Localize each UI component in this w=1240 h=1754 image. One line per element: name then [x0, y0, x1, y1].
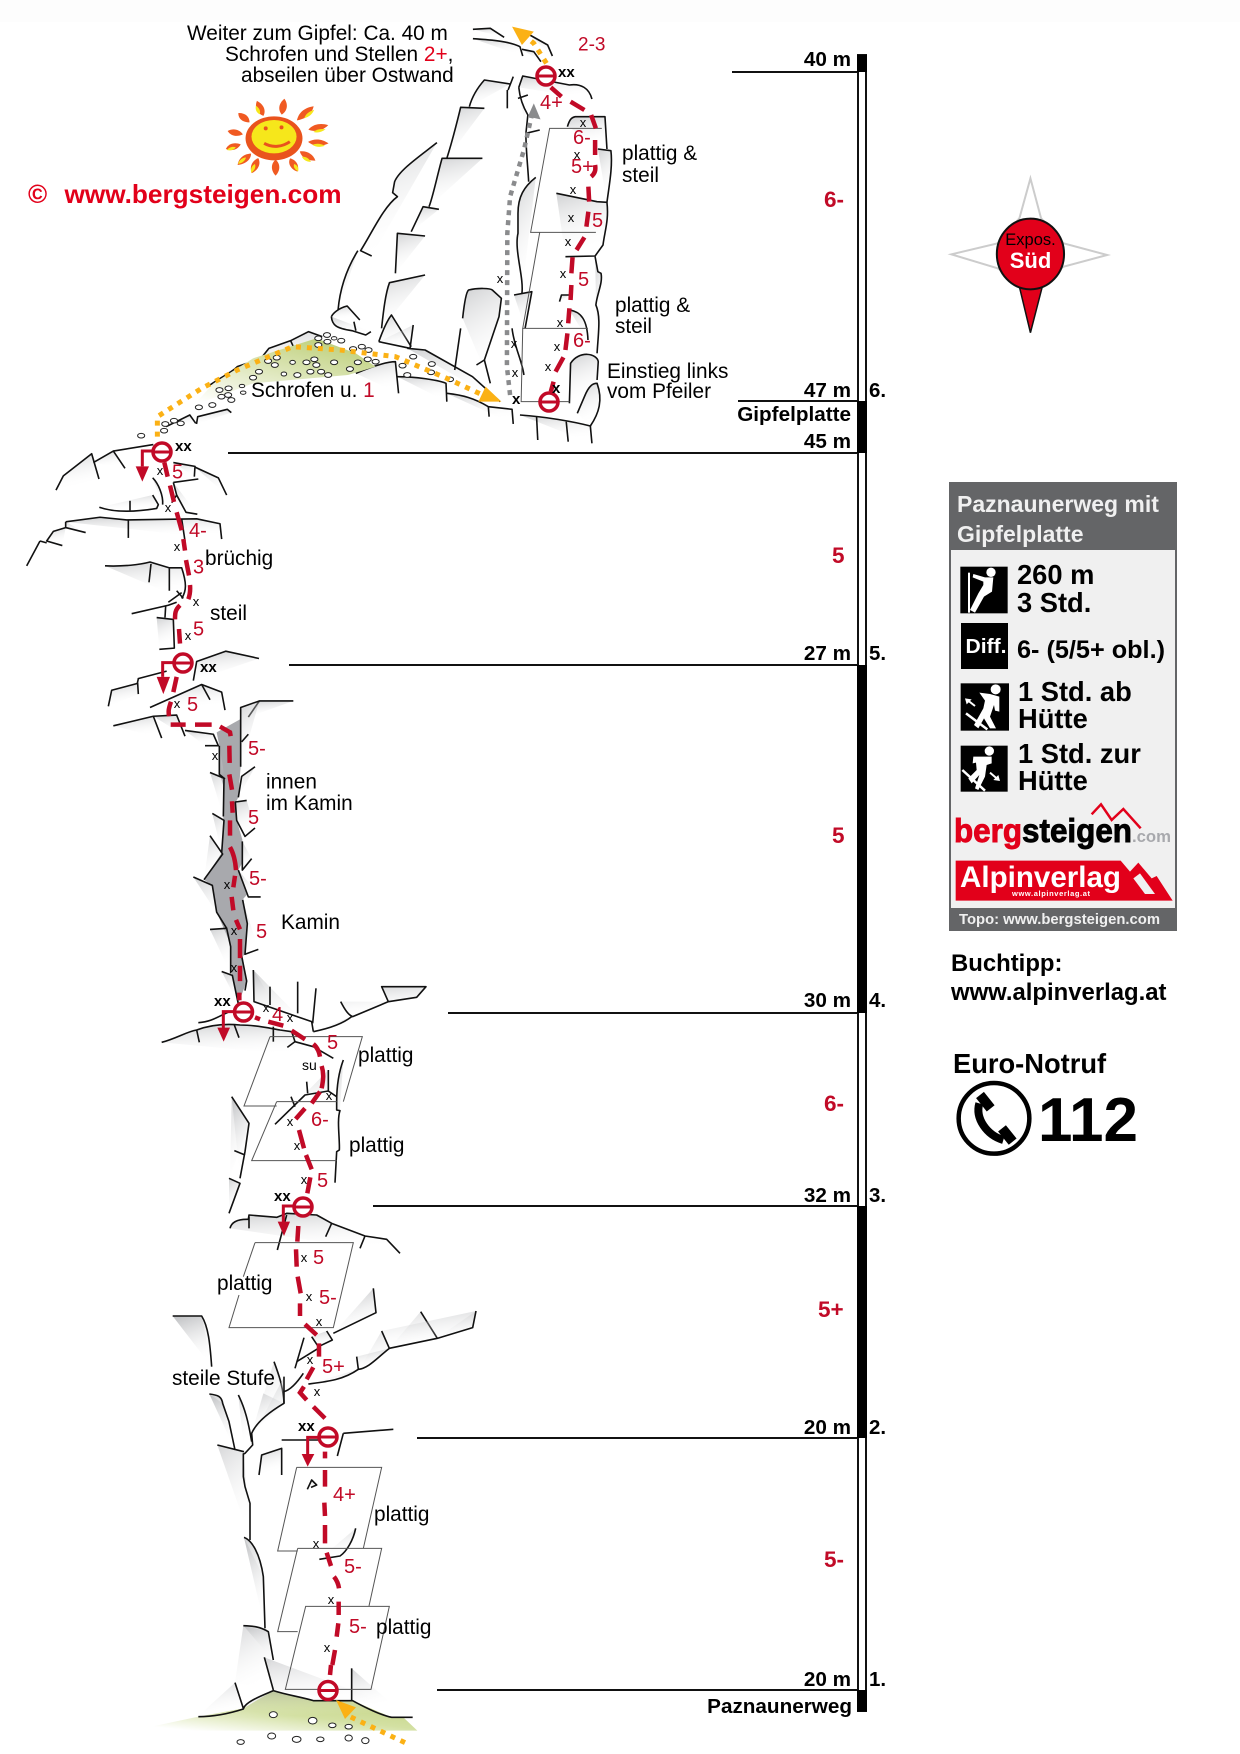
- bolt marks: [157, 115, 587, 1655]
- approach path: yellow dotted arrows: [157, 27, 546, 437]
- bolt marks: x: [185, 628, 192, 643]
- bolt marks: x: [306, 1289, 313, 1304]
- route notes: steil: [210, 602, 247, 625]
- rock face: middle pitches: [27, 445, 293, 1004]
- grade labels on the route: 5: [172, 462, 183, 484]
- icon: difficulty: [961, 623, 1008, 669]
- bolt marks: x: [287, 1010, 294, 1025]
- grade labels on the route: 5+: [571, 156, 594, 178]
- pitch grades: 6-: [824, 1091, 844, 1116]
- pitch lengths: 45 m: [804, 430, 851, 453]
- difficulty: 6- (5/5+ obl.): [1017, 636, 1165, 664]
- grade labels on the route: 6-: [573, 330, 591, 352]
- bolt marks: x: [193, 594, 200, 609]
- grade labels on the route: 5-: [248, 738, 266, 760]
- belay labels: x: [512, 391, 521, 408]
- bolt marks: x: [212, 748, 219, 763]
- route notes: steil: [622, 164, 659, 187]
- bolt marks: x: [301, 1250, 308, 1265]
- belay labels: xx: [558, 64, 575, 81]
- compass text: Expos.: [1005, 231, 1056, 249]
- bolt marks: x: [512, 365, 519, 380]
- bolt marks: x: [157, 463, 164, 478]
- logo: bergsteigen.com: bergsteigen: [954, 812, 1132, 849]
- pitch grades: 6-: [824, 187, 844, 212]
- icon: telephone: [959, 1083, 1029, 1154]
- grade labels on the route: 4-: [189, 520, 207, 542]
- pitch numbers: 3.: [869, 1184, 886, 1207]
- pitch numbers: 4.: [869, 989, 886, 1012]
- grade labels on the route: 6-: [573, 127, 591, 149]
- belay labels: xx: [175, 438, 192, 455]
- bolt marks: x: [231, 923, 238, 938]
- route notes: steile Stufe: [172, 1367, 275, 1390]
- descent time: 1 Std. zur: [1018, 738, 1141, 769]
- logo: Alpinverlag: Alpinverlag: [960, 861, 1121, 894]
- emergency heading: Euro-Notruf: [953, 1048, 1107, 1079]
- pitch lengths: 32 m: [804, 1184, 851, 1207]
- belay labels: xx: [274, 1188, 291, 1205]
- approach time: [1018, 676, 1132, 734]
- belay labels: x: [552, 380, 561, 397]
- length scale bar: [857, 55, 867, 1712]
- rock shading: lower wall: [173, 970, 476, 1716]
- approach path: start of route: [336, 1700, 405, 1743]
- climbing route: red dashes, first pitch: [324, 1452, 339, 1675]
- panel: route summary: [949, 482, 1177, 931]
- bolt marks: x: [568, 210, 575, 225]
- route notes: brüchig: [205, 547, 273, 570]
- route notes: plattig: [376, 1616, 432, 1639]
- route notes: abseilen über Ostwand: [241, 64, 454, 87]
- grade labels on the route: 4+: [540, 92, 563, 114]
- bolt marks: x: [554, 339, 561, 354]
- bolt marks: x: [497, 271, 504, 286]
- bolt marks: x: [224, 877, 231, 892]
- pitch lengths: [707, 48, 852, 1718]
- grade labels on the route: 5: [578, 269, 589, 291]
- pitch lengths: 27 m: [804, 642, 851, 665]
- route notes: Schrofen u. 1: [251, 379, 375, 402]
- bolt marks: x: [174, 539, 181, 554]
- rock face: lower pitches: [162, 970, 476, 1403]
- pitch numbers: 6.: [869, 379, 886, 402]
- pitch grades: [818, 187, 845, 1572]
- route notes: im Kamin: [266, 792, 353, 815]
- route notes: [172, 22, 728, 1639]
- grade labels on the route: 5: [248, 807, 259, 829]
- climbing length and time: 3 Std.: [1017, 587, 1091, 618]
- approach time: Hütte: [1018, 703, 1088, 734]
- bolt marks: x: [231, 960, 238, 975]
- route plates: first pitch: [278, 1467, 389, 1689]
- belay stations: red rings: [153, 67, 558, 1700]
- emergency number: 112: [1038, 1086, 1138, 1155]
- pitch lengths: 40 m: [804, 48, 851, 71]
- descent time: Hütte: [1018, 765, 1088, 796]
- route notes: Weiter zum Gipfel: Ca. 40 m: [187, 22, 448, 45]
- pitch numbers: 2.: [869, 1416, 886, 1439]
- bolt marks: x: [307, 1352, 314, 1367]
- route notes: Einstieg links: [607, 360, 728, 383]
- belay labels: xx: [298, 1418, 315, 1435]
- pitch lengths: Paznaunerweg: [707, 1695, 852, 1718]
- logo: bergsteigen.com: .com: [1132, 827, 1171, 846]
- bolt marks: x: [570, 182, 577, 197]
- descent time: [1018, 738, 1141, 796]
- bolt marks: x: [511, 336, 518, 351]
- grade labels on the route: 5-: [319, 1287, 337, 1309]
- bolt marks: x: [165, 500, 172, 515]
- grade labels on the route: 3: [193, 556, 204, 578]
- grade labels on the route: 6-: [311, 1109, 329, 1131]
- approach time: 1 Std. ab: [1018, 676, 1132, 707]
- grade labels on the route: 5-: [349, 1616, 367, 1638]
- pitch lengths: Gipfelplatte: [737, 403, 851, 426]
- copyright line: www.bergsteigen.com: [63, 179, 341, 209]
- grade labels on the route: [172, 34, 605, 1638]
- belay labels: xx: [200, 659, 217, 676]
- grade labels on the route: 5-: [344, 1556, 362, 1578]
- bolt marks: x: [580, 115, 587, 130]
- panel title: Paznaunerweg mit: [957, 491, 1159, 517]
- route plates: lower pitches: [229, 1037, 362, 1328]
- icon: sun: [225, 98, 329, 176]
- climbing route: red dashes, middle: [164, 463, 240, 1000]
- climbing length and time: [1017, 559, 1094, 618]
- rock face: summit tower: [166, 28, 611, 443]
- book tip: Buchtipp:: [951, 950, 1062, 977]
- bolt marks: x: [287, 1114, 294, 1129]
- bolt marks: x: [560, 266, 567, 281]
- bolt marks: x: [313, 1536, 320, 1551]
- icon: exposition compass: [951, 178, 1107, 333]
- route notes: su: [302, 1057, 317, 1073]
- bolt marks: x: [301, 1172, 308, 1187]
- pitch lines: [228, 72, 858, 1690]
- pitch numbers: 1.: [869, 1668, 886, 1691]
- grade labels on the route: 5-: [249, 868, 267, 890]
- icon: hiker ascent: [961, 683, 1009, 731]
- route notes: plattig &: [615, 294, 690, 317]
- climbing route: red dashes, lower: [255, 1017, 325, 1418]
- scree slope: green terrace: [138, 333, 454, 438]
- panel title: Gipfelplatte: [957, 521, 1084, 547]
- compass text: [1005, 231, 1056, 273]
- book tip: www.alpinverlag.at: [950, 979, 1167, 1006]
- bolt marks: x: [263, 1000, 270, 1015]
- route notes: plattig: [217, 1272, 272, 1295]
- pitch numbers: 5.: [869, 642, 886, 665]
- route notes: plattig: [349, 1134, 404, 1157]
- pitch lengths: 20 m: [804, 1668, 851, 1691]
- bolt marks: x: [314, 1384, 321, 1399]
- pitch grades: 5-: [824, 1547, 844, 1572]
- panel footer: Topo: www.bergsteigen.com: [959, 911, 1160, 928]
- grade labels on the route: 5: [256, 921, 267, 943]
- route notes: steil: [615, 315, 652, 338]
- route notes: plattig &: [622, 142, 697, 165]
- bolt marks: x: [174, 696, 181, 711]
- grade labels on the route: 5: [592, 210, 603, 232]
- bolt marks: x: [557, 315, 564, 330]
- bolt marks: x: [574, 147, 581, 162]
- grade labels on the route: 5: [187, 694, 198, 716]
- icon: hiker descent: [961, 746, 1008, 792]
- route notes: Kamin: [281, 911, 340, 934]
- copyright line: ©: [28, 179, 47, 209]
- grade labels on the route: 5: [193, 618, 204, 640]
- route plates: summit tower: [521, 128, 602, 402]
- bolt marks: x: [294, 1138, 301, 1153]
- bolt marks: x: [545, 359, 552, 374]
- logo: Alpinverlag: [956, 861, 1173, 901]
- chimney: grey fill: [204, 719, 247, 1004]
- bolt marks: x: [565, 234, 572, 249]
- belay labels: [175, 64, 575, 1435]
- grade labels on the route: 5: [313, 1247, 324, 1269]
- bolt marks: x: [316, 1314, 323, 1329]
- route notes: Schrofen und Stellen 2+,: [225, 43, 453, 66]
- route notes: plattig: [358, 1044, 414, 1067]
- climbing length and time: 260 m: [1017, 559, 1094, 590]
- climbing route: red dashes, summit tower: [551, 87, 596, 392]
- descent path: grey dotted arrow: [507, 103, 541, 395]
- grade labels on the route: 4: [272, 1004, 283, 1026]
- pitch lengths: 20 m: [804, 1416, 851, 1439]
- route notes: innen: [266, 770, 317, 794]
- pitch grades: 5: [832, 543, 845, 568]
- pitch lengths: 47 m: [804, 379, 851, 402]
- icon: difficulty: Diff.: [966, 636, 1006, 658]
- grade labels on the route: 5: [317, 1170, 328, 1192]
- meadow at the start: [143, 1691, 417, 1744]
- bolt marks: x: [328, 1592, 335, 1607]
- panel title: [957, 491, 1159, 547]
- compass text: Süd: [1010, 248, 1051, 273]
- rock face: first pitch: [198, 1377, 413, 1717]
- route notes: plattig: [374, 1503, 430, 1526]
- icon: climber: [960, 567, 1008, 613]
- pitch grades: 5: [832, 823, 845, 848]
- route notes: vom Pfeiler: [607, 380, 711, 403]
- grade labels on the route: 5+: [322, 1356, 345, 1378]
- logo: Alpinverlag: www.alpinverlag.at: [1011, 889, 1090, 898]
- belay labels: xx: [214, 993, 231, 1010]
- grade labels on the route: 5: [327, 1032, 338, 1054]
- book tip: [950, 950, 1167, 1006]
- pitch grades: 5+: [818, 1297, 844, 1322]
- bolt marks: x: [326, 1088, 333, 1103]
- pitch numbers: [869, 379, 886, 1691]
- pitch lengths: 30 m: [804, 989, 851, 1012]
- abseil arrows: [136, 451, 320, 1467]
- grade labels on the route: 2-3: [578, 34, 605, 56]
- grade labels on the route: 4+: [333, 1484, 356, 1506]
- bolt marks: x: [324, 1640, 331, 1655]
